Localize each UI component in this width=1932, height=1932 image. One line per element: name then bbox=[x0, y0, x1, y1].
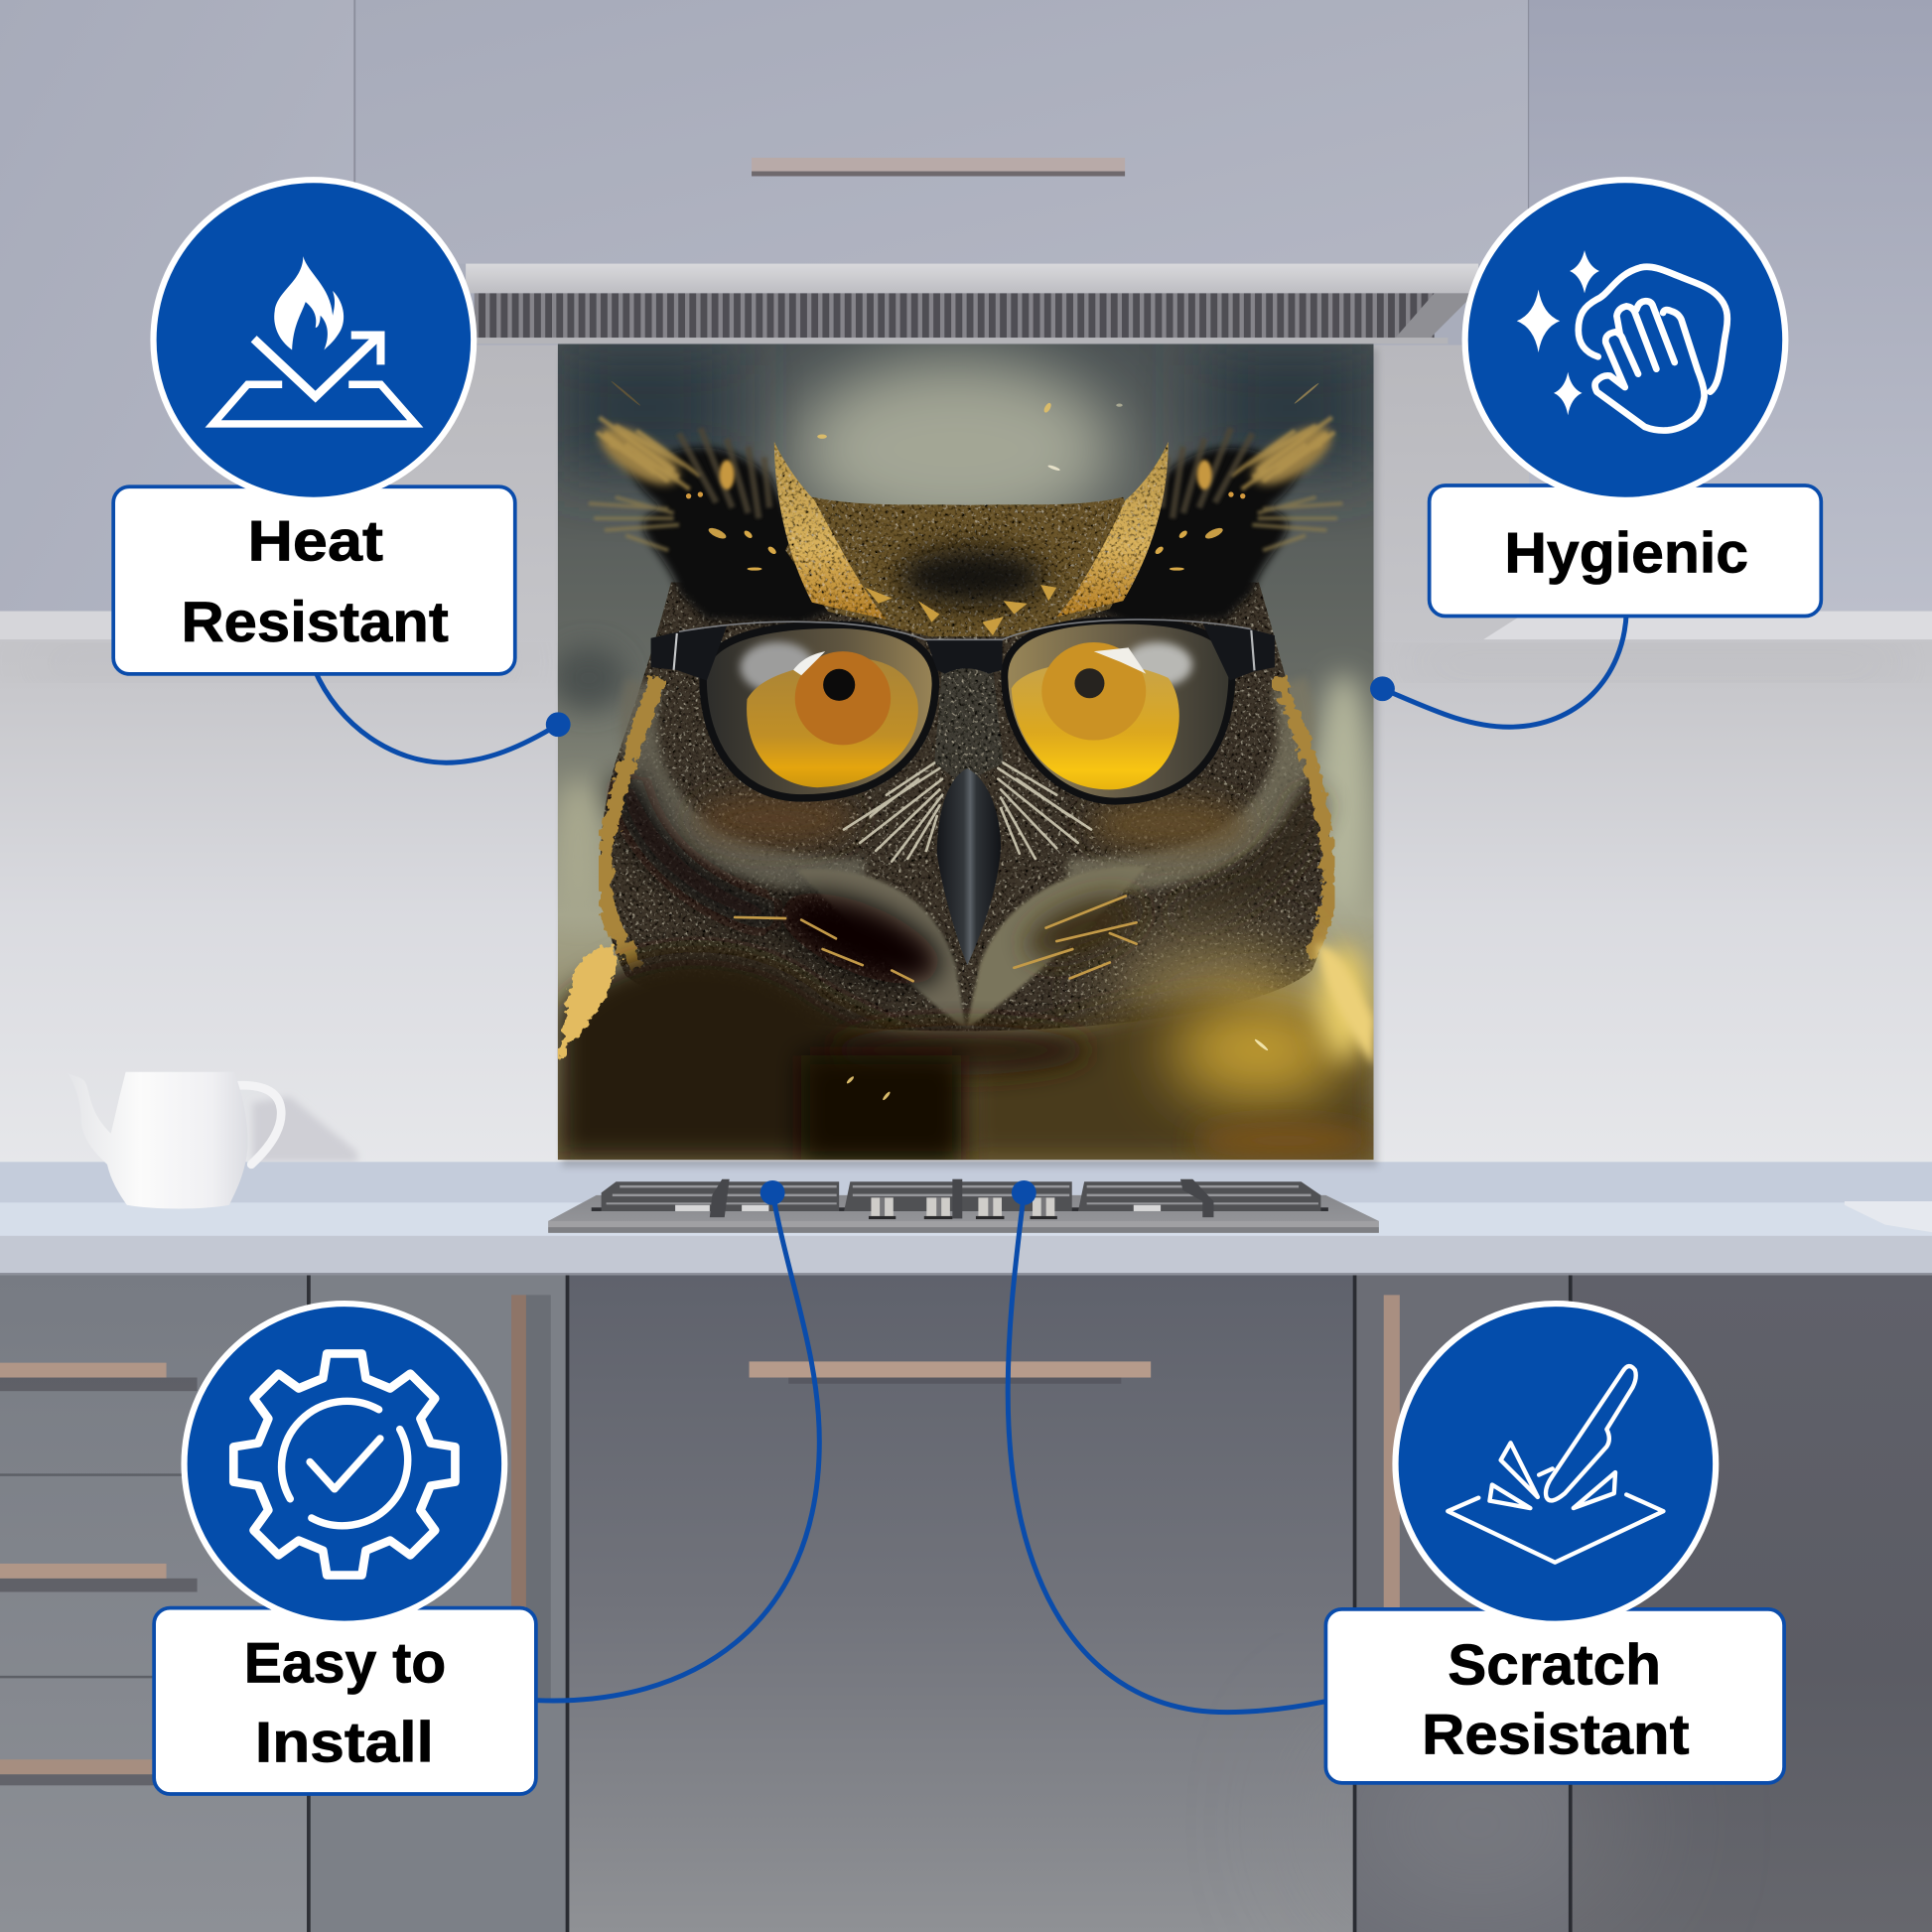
gas hob bbox=[548, 1179, 1379, 1233]
connector: hygienic bbox=[1370, 613, 1626, 727]
left lens bbox=[703, 624, 935, 798]
ear tuft right bbox=[1093, 415, 1342, 624]
beak and whiskers bbox=[844, 667, 1091, 965]
forehead bbox=[774, 442, 1169, 636]
heading: Easy to bbox=[244, 1632, 446, 1696]
burner grates bbox=[602, 1179, 1320, 1218]
icon: flame over surface bbox=[213, 256, 415, 424]
heading line two: Resistant bbox=[181, 591, 449, 654]
heading: Scratch bbox=[1448, 1634, 1661, 1698]
label box bbox=[113, 486, 515, 674]
label box bbox=[154, 1608, 536, 1794]
label box bbox=[1430, 485, 1821, 617]
facial ruff bbox=[625, 683, 1314, 917]
badge circle bbox=[1465, 180, 1785, 500]
misty panel backdrop bbox=[551, 344, 1374, 1160]
tiled wall bbox=[0, 0, 1932, 1165]
heading line two: Resistant bbox=[1422, 1704, 1690, 1767]
frame blocks and bridge bbox=[651, 623, 1275, 681]
callout: easy to install bbox=[154, 1304, 536, 1794]
golden rim light bbox=[605, 678, 660, 968]
callout: heat resistant bbox=[113, 180, 515, 674]
golden rim light right bbox=[1278, 678, 1329, 954]
counter bbox=[0, 1162, 1932, 1276]
heading: Hygienic bbox=[1504, 521, 1748, 585]
badge circle bbox=[1396, 1304, 1716, 1624]
right lens bbox=[1005, 621, 1232, 801]
badge circle bbox=[185, 1304, 504, 1624]
control knobs bbox=[869, 1197, 1057, 1219]
connector: scratch resistant bbox=[1008, 1180, 1324, 1713]
owl splashback panel bbox=[551, 344, 1378, 1167]
body in shadow bbox=[558, 944, 1376, 1160]
head bbox=[601, 582, 1331, 1031]
icon: knife scratching surface bbox=[1448, 1366, 1663, 1563]
ear tuft left bbox=[589, 415, 839, 624]
base cabinets bbox=[0, 1276, 1932, 1932]
callout: hygienic bbox=[1430, 180, 1821, 617]
white teapot bbox=[68, 1072, 281, 1208]
badge circle bbox=[154, 180, 474, 500]
label box bbox=[1325, 1609, 1784, 1783]
floating sparks bbox=[611, 380, 1319, 1101]
icon: gear with check bbox=[233, 1353, 455, 1576]
connector: heat resistant bbox=[314, 669, 571, 762]
heading: Heat bbox=[247, 510, 383, 574]
heading line two: Install bbox=[255, 1712, 434, 1775]
connector: easy to install bbox=[537, 1180, 819, 1701]
glasses bbox=[651, 620, 1275, 801]
callout: scratch resistant bbox=[1325, 1304, 1784, 1783]
lower plumage and chin bbox=[735, 866, 1302, 1050]
extractor hood bbox=[466, 264, 1478, 344]
upper cabinets bbox=[0, 0, 1932, 612]
icon: hand wiping with sparkles bbox=[1517, 250, 1727, 431]
